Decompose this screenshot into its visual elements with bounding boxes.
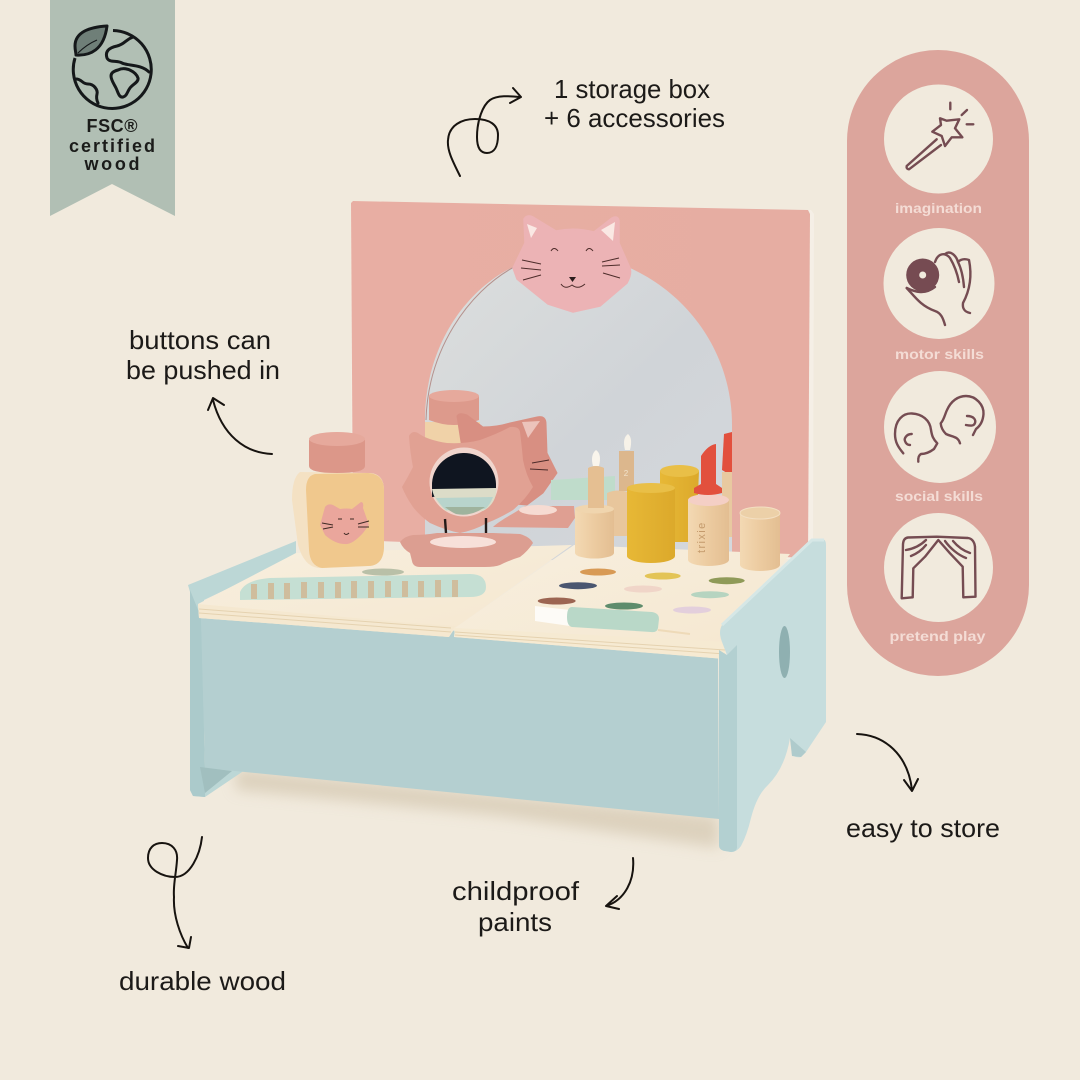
left side panel (188, 541, 296, 797)
mirror reflection: bottle (425, 422, 480, 470)
cat compact mirror (400, 427, 533, 567)
callout: durable wood: durable wood (119, 966, 286, 996)
bottle (292, 432, 384, 568)
candle (575, 450, 614, 558)
back panel with mirror (351, 201, 814, 560)
lipstick with trixie logo (688, 444, 729, 566)
arrow: looped up to text (448, 88, 521, 176)
skill: motor skills: motor skills (895, 346, 984, 362)
callout: durable wood (119, 837, 286, 996)
mirror reflection: cat and base (457, 414, 557, 505)
skill: social skills: social skills (895, 488, 983, 504)
callout: buttons can be pushed in: be pushed in (126, 355, 280, 385)
callout: buttons can be pushed in (126, 325, 280, 454)
skill: social skills (884, 371, 996, 504)
callout: storage box and accessories (448, 74, 725, 176)
candle, reflected (607, 434, 634, 536)
badge text: wood (84, 154, 140, 174)
callout: childproof paints: paints (478, 907, 552, 937)
floor shadow (235, 768, 719, 848)
icon: globe with leaf (73, 26, 151, 108)
lipstick, reflected (722, 432, 732, 537)
comb (240, 574, 486, 600)
right side panel (719, 539, 826, 852)
yellow pot, back (660, 465, 699, 542)
arrow: to text (606, 858, 633, 909)
arrow: looped down to text (148, 837, 202, 948)
brush (535, 606, 690, 634)
candle, reflected: 2 (624, 469, 629, 478)
left side leg shade (190, 590, 205, 797)
skill: imagination: imagination (895, 200, 982, 216)
yellow pot (627, 483, 675, 563)
skill: pretend play: pretend play (890, 628, 986, 644)
callout: storage box and accessories: 1 storage box (554, 74, 710, 104)
badge text: certified (69, 136, 155, 156)
badge text: FSC® (86, 116, 138, 136)
banner: FSC certified wood (50, 0, 175, 216)
arrow: to buttons (208, 398, 272, 454)
paint wells (538, 568, 745, 614)
lipstick with trixie logo: trixie (696, 521, 708, 553)
wall cat face (513, 216, 631, 312)
photo: wooden vanity toy (188, 201, 826, 852)
skill: motor skills (884, 228, 994, 362)
callout: childproof paints (452, 858, 633, 937)
badge text (69, 116, 155, 174)
callout: easy to store: easy to store (846, 813, 1000, 843)
callout: buttons can be pushed in: buttons can (129, 325, 271, 355)
callout: childproof paints: childproof (452, 876, 580, 906)
wooden cup (740, 507, 780, 571)
callout: easy to store (846, 734, 1000, 843)
box front (198, 612, 719, 819)
skill: pretend play (884, 513, 993, 644)
arrow: down to text (857, 734, 918, 791)
skill: imagination (884, 84, 993, 216)
table top: left lid (198, 545, 572, 637)
table top: right lid (454, 545, 790, 659)
callout: storage box and accessories: + 6 accessories (544, 103, 725, 133)
panel: developmental skills pill (847, 50, 1029, 676)
